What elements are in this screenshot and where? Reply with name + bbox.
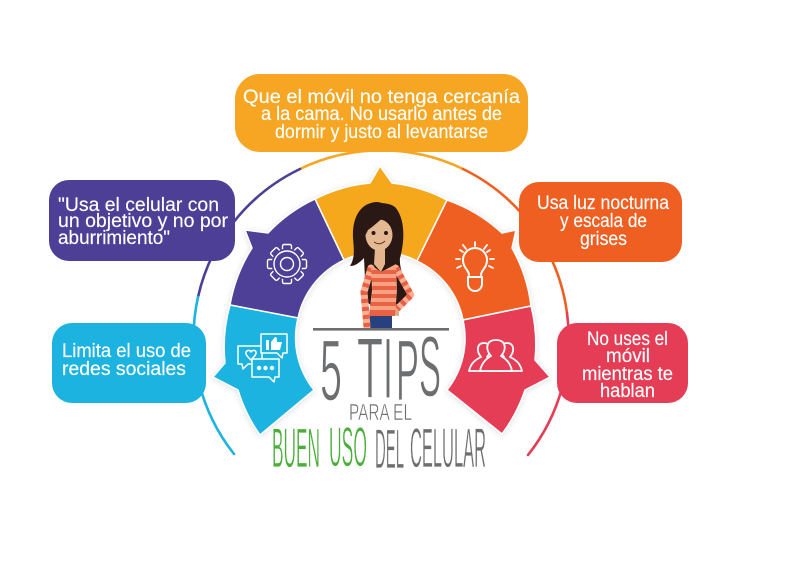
callout: blue	[52, 323, 206, 403]
icon: social bubbles	[238, 334, 287, 382]
title: 5 tips: 5	[320, 323, 342, 419]
infographic canvas: S	[419, 319, 441, 415]
segment: blue	[213, 305, 314, 435]
segment: yellow	[315, 166, 447, 261]
fringe	[365, 212, 396, 238]
callout: orange: y escala de	[560, 211, 647, 232]
character: girl	[350, 202, 411, 328]
title: 5 tips: T	[357, 321, 383, 417]
segment: purple	[230, 199, 344, 318]
segment: orange	[417, 200, 531, 320]
face	[366, 220, 392, 250]
segmented semicircle	[213, 166, 550, 435]
subtitle: para el: PARA EL	[349, 399, 412, 425]
callout: yellow	[235, 74, 528, 152]
title: 5 tips	[320, 319, 441, 419]
callout: yellow: dormir y justo al levantarse	[275, 122, 488, 143]
infographic canvas	[49, 74, 688, 468]
callout: orange: Usa luz nocturna	[537, 193, 669, 214]
icon: gear	[268, 244, 306, 284]
jeans	[369, 314, 392, 328]
callout: red: móvil	[606, 346, 650, 367]
callout: red: mientras te	[582, 364, 673, 385]
callout: orange: grises	[580, 229, 627, 250]
callout: purple: un objetivo y no por	[58, 211, 229, 232]
torso	[369, 264, 397, 316]
callout: purple	[49, 180, 235, 261]
icon: people	[469, 340, 522, 371]
callout: purple: "Usa el celular con	[58, 195, 219, 216]
hand	[391, 307, 399, 316]
icon: light bulb	[456, 242, 494, 291]
outer ring	[194, 150, 569, 455]
subtitle: buen uso del celular: BUEN	[272, 416, 320, 479]
callout: red: hablan	[600, 381, 655, 402]
heading rule	[313, 328, 449, 331]
subtitle: buen uso del celular: USO	[329, 415, 367, 478]
left arm	[364, 268, 371, 327]
callout: blue: Limita el uso de	[62, 341, 191, 362]
neck	[374, 248, 385, 272]
right arm	[396, 268, 411, 309]
callout: blue: redes sociales	[62, 359, 186, 380]
eyes and smile	[372, 231, 388, 244]
callout: yellow: Que el móvil no tenga cercanía	[243, 87, 520, 108]
callout: yellow: a la cama. No usarlo antes de	[261, 104, 502, 125]
back hair	[350, 202, 408, 308]
callout: red: No uses el	[587, 329, 668, 350]
infographic canvas: CELULAR	[410, 416, 486, 479]
subtitle: buen uso del celular: DEL	[375, 417, 404, 480]
callout: orange	[519, 182, 682, 262]
title: 5 tips: I	[383, 321, 393, 417]
callout: purple: aburrimiento"	[58, 228, 170, 249]
callout: red	[557, 323, 688, 403]
segment: red	[447, 306, 550, 434]
title: 5 tips: P	[396, 323, 419, 419]
